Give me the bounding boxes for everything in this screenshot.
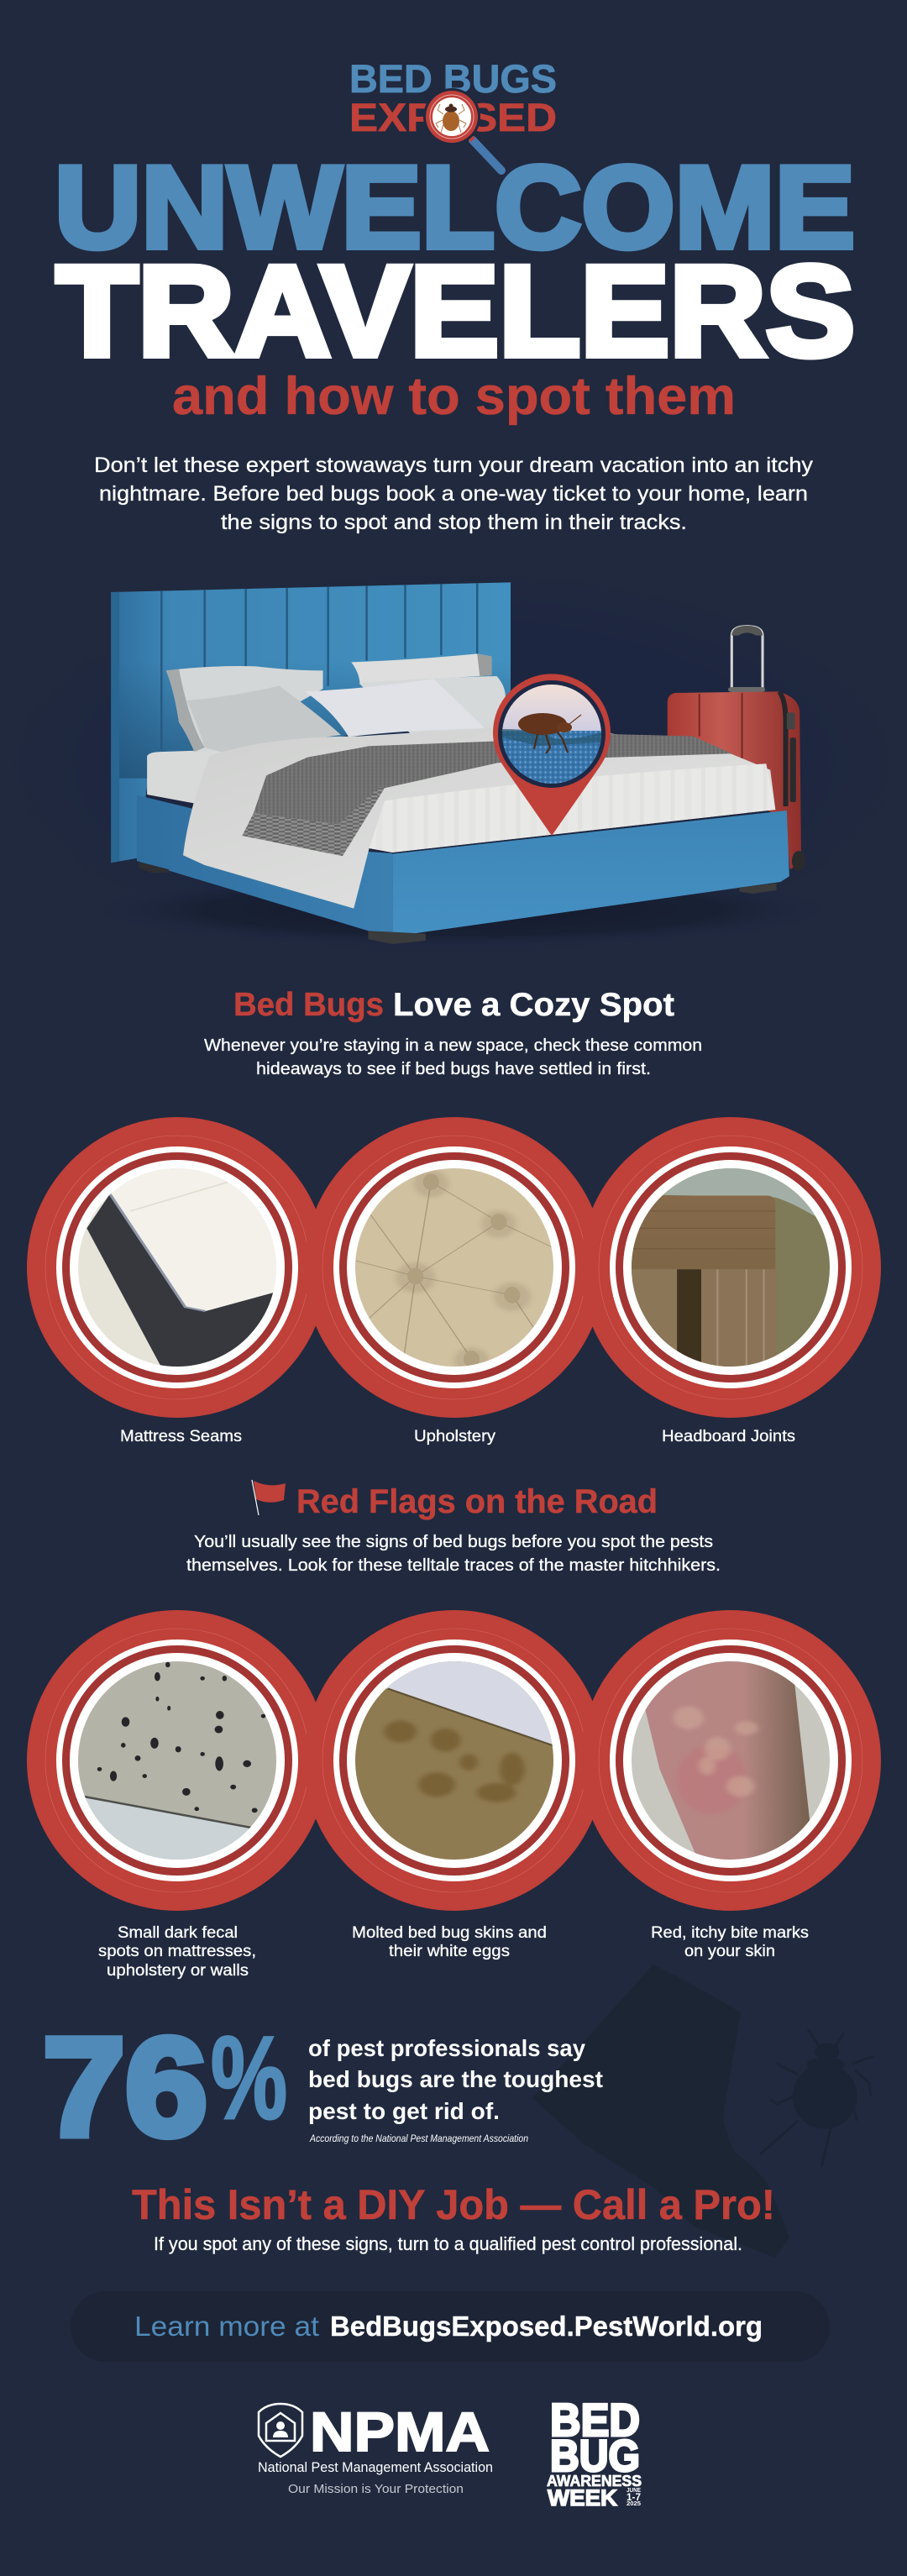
callout: learn more pill bbox=[71, 2291, 830, 2362]
logo: NPMA bbox=[258, 2400, 493, 2496]
icon: NPMA shield bbox=[259, 2404, 302, 2457]
text: call a pro description: If you spot any of these signs, turn to a qualified pest control professional. bbox=[154, 2233, 742, 2254]
title: Travelers: TRAVELERS bbox=[56, 239, 855, 383]
text: hideaways intro: Whenever you’re staying in a new space, check these common bbox=[204, 1036, 702, 1055]
intro paragraph bbox=[94, 454, 814, 534]
title: Unwelcome: UNWELCOME bbox=[55, 143, 855, 272]
heading: Bed Bugs Love a Cozy Spot bbox=[233, 987, 674, 1023]
source note: According to the National Pest Management Association bbox=[309, 2133, 528, 2144]
pillows bbox=[351, 653, 491, 684]
logo: Bed Bug Awareness Week bbox=[547, 2394, 642, 2510]
stat: 76%: 76 bbox=[43, 2010, 207, 2165]
icon: magnifying glass with bed bug bbox=[423, 88, 501, 171]
bed bbox=[92, 582, 832, 947]
callout: learn more pill: BedBugsExposed.PestWorld.org bbox=[330, 2311, 763, 2342]
throw blanket bbox=[254, 734, 731, 825]
captions: hideaways: Upholstery bbox=[414, 1427, 495, 1445]
text: red flags intro: themselves. Look for these telltale traces of the master hitchhikers. bbox=[186, 1556, 721, 1575]
captions: hideaways: Headboard Joints bbox=[662, 1427, 795, 1445]
heading: call a pro: This Isn’t a DIY Job — Call a Pro! bbox=[132, 2181, 775, 2228]
circle: upholstery bbox=[304, 1117, 605, 1418]
heading: Red Flags on the Road: Red Flags on the Road bbox=[296, 1483, 658, 1520]
bed bug bbox=[518, 713, 581, 753]
heading: Bed Bugs Love a Cozy Spot: Bed Bugs bbox=[233, 987, 384, 1023]
silhouette: boot bbox=[532, 1965, 789, 2258]
logo: Bed Bug Awareness Week: WEEK bbox=[548, 2485, 618, 2510]
intro paragraph: nightmare. Before bed bugs book a one-way ticket to your home, learn bbox=[99, 482, 808, 506]
circle: bite marks bbox=[580, 1610, 881, 1911]
captions: red flags: spots on mattresses, bbox=[98, 1942, 256, 1960]
text: red flags intro: You’ll usually see the signs of bed bugs before you spot the pests bbox=[194, 1532, 713, 1551]
logo: Bed Bug Awareness Week: BED bbox=[550, 2394, 640, 2446]
suitcase bbox=[668, 626, 805, 871]
intro paragraph: Don’t let these expert stowaways turn your dream vacation into an itchy bbox=[94, 454, 814, 477]
logo: NPMA: Our Mission is Your Protection bbox=[288, 2482, 464, 2496]
text: hideaways intro bbox=[204, 1036, 702, 1078]
captions: red flags: upholstery or walls bbox=[107, 1961, 249, 1980]
silhouette: bed bug bbox=[760, 2029, 873, 2167]
callout: learn more pill: Learn more at bbox=[134, 2311, 319, 2342]
logo: NPMA: National Pest Management Association bbox=[258, 2459, 493, 2475]
captions: red flags: Small dark fecal bbox=[118, 1923, 238, 1942]
panel: hideaway circles bbox=[27, 1117, 881, 1418]
intro paragraph: the signs to spot and stop them in their tracks. bbox=[221, 511, 687, 534]
illustration: bed and suitcase bbox=[111, 582, 805, 944]
stat: 76%: % bbox=[211, 2012, 287, 2143]
map pin with bed bug bbox=[493, 674, 611, 836]
circle: mattress seams bbox=[27, 1117, 328, 1418]
logo: Bed Bug Awareness Week: 2025 bbox=[627, 2501, 641, 2507]
captions: red flags: on your skin bbox=[684, 1942, 775, 1960]
stat description: of pest professionals say bbox=[308, 2035, 585, 2061]
panel: red flag circles bbox=[27, 1610, 881, 1911]
logo: Bed Bug Awareness Week: JUNE bbox=[627, 2488, 641, 2494]
stat: 76% bbox=[43, 2010, 287, 2165]
captions: red flags: Molted bed bug skins and bbox=[352, 1923, 547, 1942]
stat description: bed bugs are the toughest bbox=[308, 2066, 603, 2092]
logo: Bed Bug Awareness Week: AWARENESS bbox=[547, 2473, 642, 2489]
circle: headboard joints bbox=[580, 1117, 881, 1418]
captions: red flags: their white eggs bbox=[389, 1942, 510, 1960]
logo text: Bed Bugs: BED BUGS bbox=[349, 56, 557, 101]
base bbox=[137, 795, 392, 936]
stat description bbox=[308, 2035, 603, 2124]
stat description: pest to get rid of. bbox=[308, 2098, 500, 2124]
circle: fecal spots bbox=[27, 1610, 328, 1911]
logo: Bed Bugs Exposed bbox=[349, 56, 557, 139]
captions: hideaways: Mattress Seams bbox=[120, 1427, 242, 1445]
logo: NPMA: NPMA bbox=[310, 2400, 490, 2463]
icon: red flag bbox=[252, 1480, 286, 1515]
text: hideaways intro: hideaways to see if bed bugs have settled in first. bbox=[256, 1059, 651, 1078]
heading: Bed Bugs Love a Cozy Spot: Love a Cozy Spot bbox=[393, 987, 674, 1023]
captions: hideaways bbox=[120, 1427, 795, 1445]
circle: molted skins bbox=[304, 1610, 605, 1911]
logo text: Exposed: EXPOSED bbox=[349, 95, 557, 139]
text: red flags intro bbox=[186, 1532, 721, 1575]
fitted sheet bbox=[147, 750, 225, 809]
headboard bbox=[111, 582, 511, 863]
captions: red flags: Red, itchy bite marks bbox=[651, 1923, 809, 1942]
captions: red flags bbox=[98, 1923, 809, 1980]
logo: Bed Bug Awareness Week: 1-7 bbox=[627, 2491, 641, 2503]
subtitle: and how to spot them: and how to spot them bbox=[172, 367, 736, 426]
logo: Bed Bug Awareness Week: BUG bbox=[550, 2432, 640, 2481]
duvet bbox=[183, 728, 775, 909]
